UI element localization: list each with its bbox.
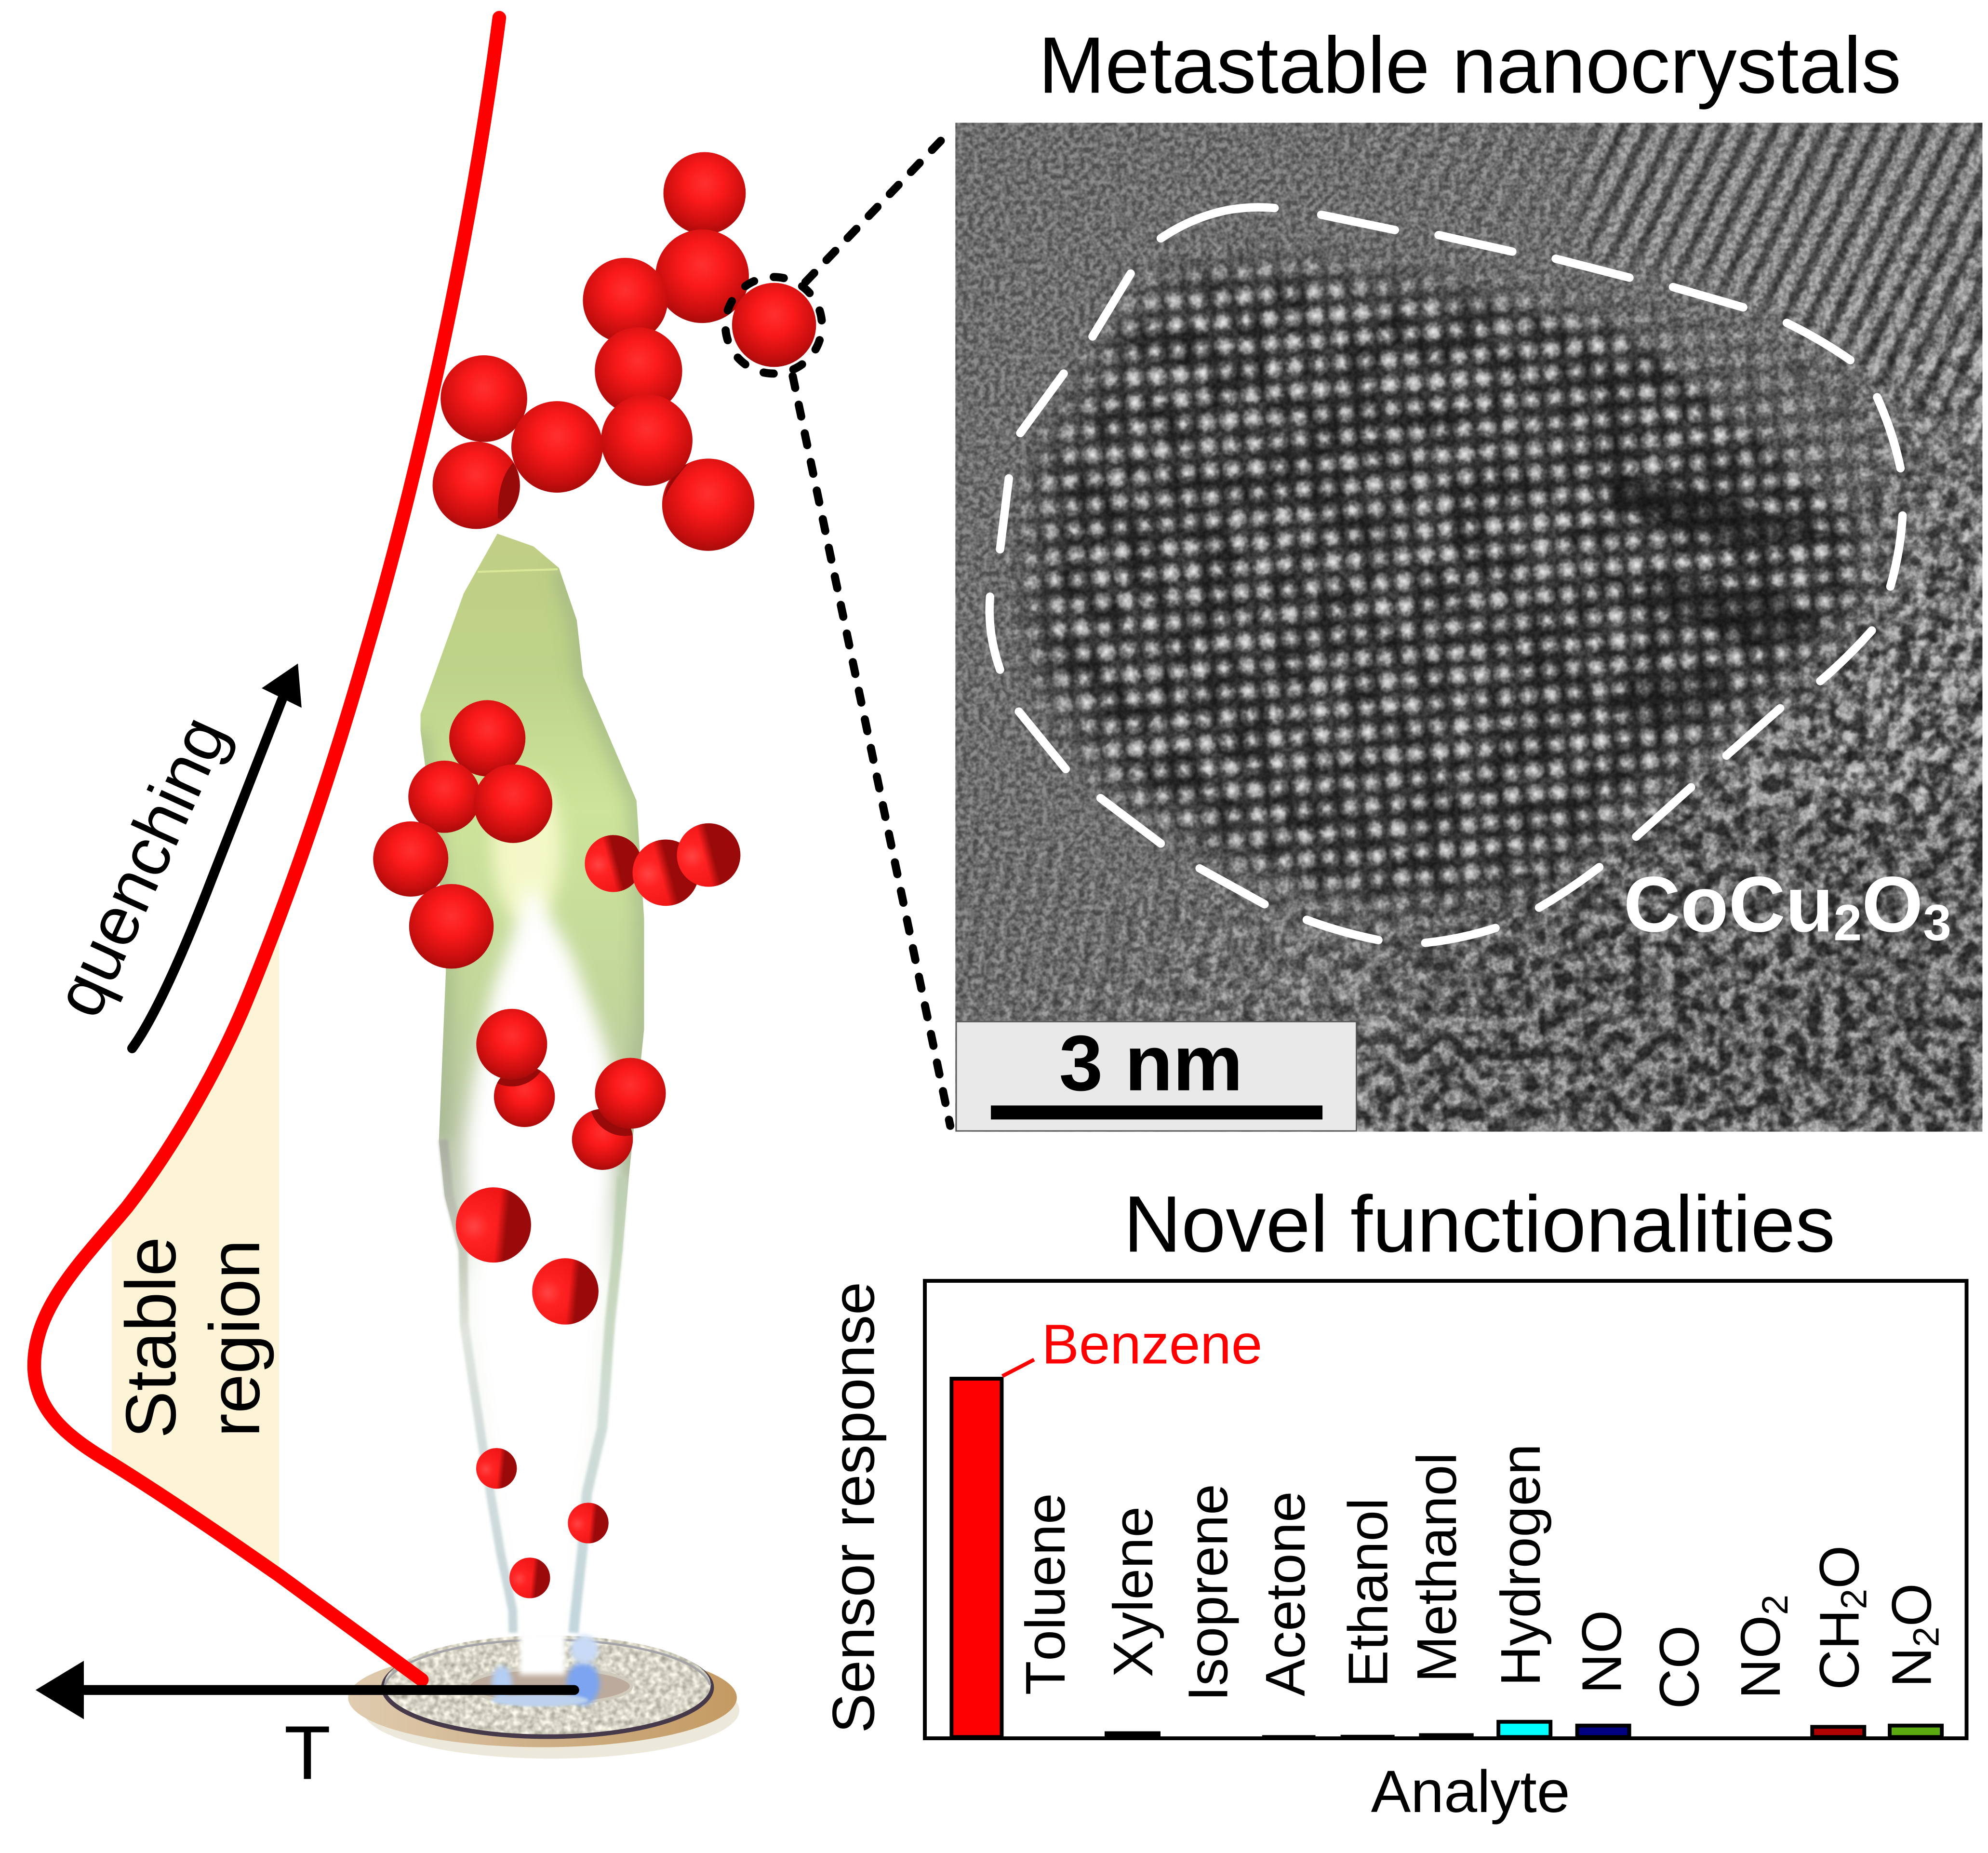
analyte labels: 2 <box>1906 1626 1947 1647</box>
heading: Novel functionalities: Novel functionalities <box>1123 1180 1835 1269</box>
label: CoCu2O3: CoCu <box>1624 860 1833 948</box>
label: T: T <box>284 1710 331 1795</box>
label: Stable region: region <box>195 1239 275 1437</box>
label: CoCu2O3: 3 <box>1923 895 1951 952</box>
micrograph grain <box>955 122 1988 1133</box>
chart frame <box>925 1281 1967 1738</box>
flame <box>421 534 644 1675</box>
analyte labels <box>1014 1444 1947 1709</box>
heading: Metastable nanocrystals: Metastable nanocrystals <box>1039 21 1901 110</box>
analyte labels: Acetone <box>1254 1491 1317 1696</box>
analyte labels: NO <box>1729 1615 1792 1699</box>
analyte labels: CH <box>1808 1609 1870 1690</box>
x axis title: Analyte <box>1371 1759 1570 1825</box>
analyte labels: Isoprene <box>1176 1484 1239 1702</box>
analyte labels: O <box>1881 1583 1943 1626</box>
highlighted particle <box>732 283 816 367</box>
TEM micrograph <box>955 122 1988 1133</box>
label: Stable region <box>111 1236 275 1438</box>
stable region shading <box>112 934 279 1576</box>
label: CoCu2O3: 2 <box>1833 895 1862 952</box>
temperature axis arrow <box>36 1661 574 1719</box>
scale bar label: 3 nm <box>1059 1019 1243 1107</box>
scale bar panel <box>956 1019 1356 1131</box>
bar chart <box>821 1281 1967 1825</box>
analyte labels: Xylene <box>1102 1506 1164 1678</box>
analyte labels: Hydrogen <box>1489 1444 1552 1686</box>
analyte labels: CO <box>1648 1625 1710 1709</box>
lattice fringes <box>955 122 1988 1133</box>
scale bar <box>991 1105 1322 1119</box>
lower region mottling <box>955 122 1988 1133</box>
dotted zoom circle and lines <box>725 131 950 1126</box>
analyte labels: Toluene <box>1014 1493 1077 1695</box>
analyte labels: Ethanol <box>1337 1498 1400 1688</box>
dashed nanocrystal outline <box>989 207 1903 943</box>
bars <box>951 1379 1942 1737</box>
benzene label: Benzene <box>1042 1313 1262 1375</box>
analyte labels: Methanol <box>1405 1452 1468 1682</box>
flame particles <box>373 700 740 1598</box>
quenching arrow <box>132 664 302 1048</box>
label: quenching: quenching <box>40 705 242 1028</box>
top particle cluster <box>433 152 816 551</box>
temperature curve <box>34 18 499 1680</box>
analyte labels: O <box>1808 1545 1870 1589</box>
label: CoCu2O3: O <box>1862 860 1923 948</box>
analyte labels: NO <box>1571 1610 1633 1694</box>
crystal lattice <box>955 122 1988 1133</box>
analyte labels: 2 <box>1755 1595 1796 1615</box>
flame burner disc <box>348 1636 739 1759</box>
y axis title: Sensor response <box>821 1282 887 1733</box>
analyte labels: N <box>1881 1647 1943 1688</box>
analyte labels: 2 <box>1833 1589 1874 1609</box>
flame lower edge bands <box>443 1140 513 1633</box>
label: Stable region: Stable <box>111 1236 191 1438</box>
